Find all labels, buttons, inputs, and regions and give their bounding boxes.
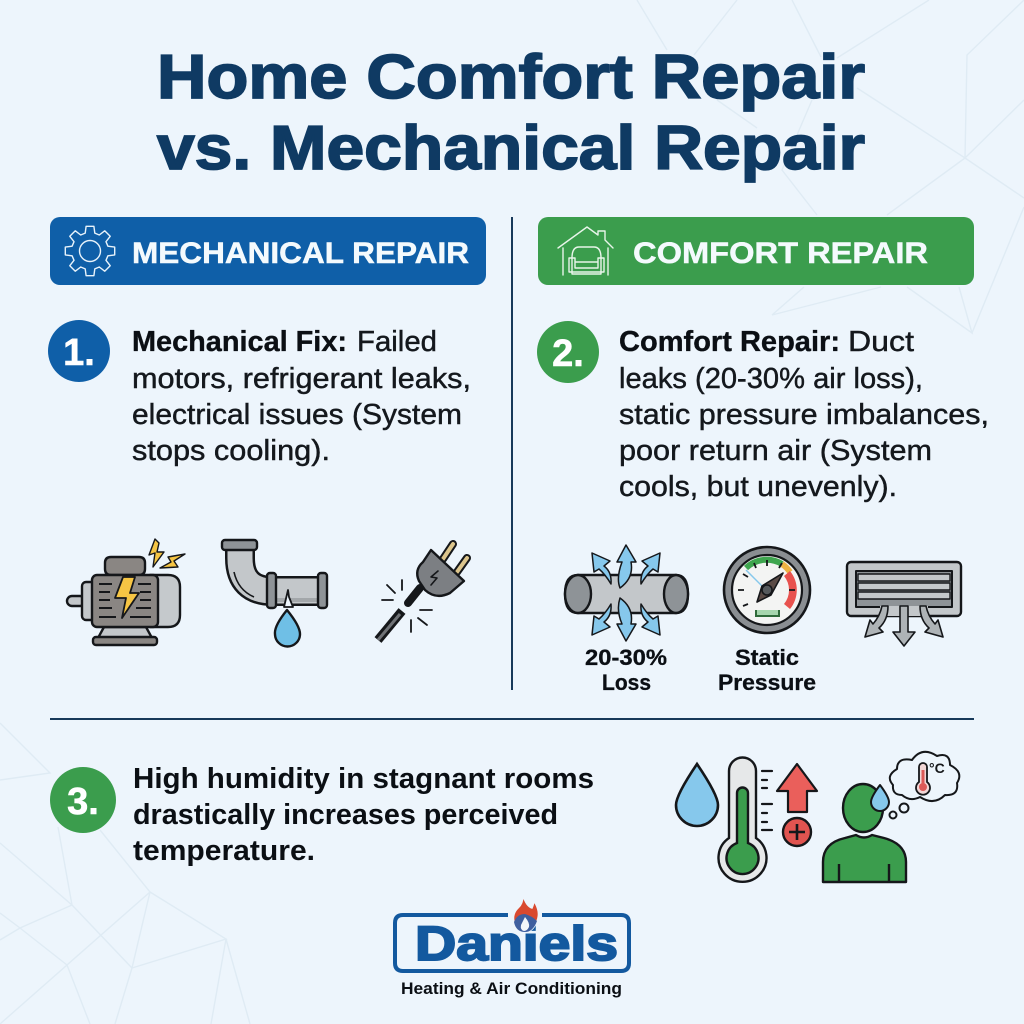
heading: mechanical repair: MECHANICAL REPAIR [132, 237, 469, 270]
text block: mechanical fix: Failed [357, 326, 437, 358]
text block: comfort repair: Comfort Repair: [619, 326, 840, 358]
title [157, 43, 865, 183]
title: vs. Mechanical Repair [157, 114, 865, 183]
tagline: Heating & Air Conditioning [401, 979, 622, 998]
text block: humidity [133, 763, 594, 867]
icon: leaking pipe [222, 540, 327, 646]
text block: mechanical fix: Mechanical Fix: [132, 326, 347, 358]
badge: number 2: 2. [552, 333, 584, 375]
icon: static pressure gauge [724, 547, 810, 633]
badge: number 3 [50, 767, 116, 833]
logo: Daniels [395, 895, 629, 998]
icon: house with sofa [558, 227, 613, 275]
text block: humidity: temperature. [133, 835, 315, 867]
text block: mechanical fix: stops cooling). [132, 435, 330, 467]
text block: humidity: drastically increases perceived [133, 799, 558, 831]
icon: thought bubble with thermometer [890, 752, 959, 818]
badge: number 1: 1. [63, 332, 95, 374]
icon: sweating person [823, 784, 906, 882]
horizontal divider [50, 718, 974, 720]
text block: mechanical fix: motors, refrigerant leaks, [132, 363, 471, 395]
text block: humidity: High humidity in stagnant rooms [133, 763, 594, 795]
panel: comfort repair header [538, 217, 974, 285]
icon: gear [65, 226, 115, 276]
icon: thought bubble with thermometer: °C [929, 760, 945, 776]
icon: temperature up arrow [777, 764, 817, 846]
text block: comfort repair: static pressure imbalances, [619, 399, 989, 431]
label: static pressure: Static [735, 645, 799, 670]
label: 20-30% loss [585, 645, 667, 695]
label: 20-30% loss: Loss [602, 670, 651, 695]
text block: comfort repair: Duct [848, 326, 914, 358]
text block: comfort repair: poor return air (System [619, 435, 932, 467]
icon: air vent [847, 562, 961, 646]
heading: comfort repair: COMFORT REPAIR [633, 237, 928, 270]
vertical divider [511, 217, 513, 690]
logo: Daniels: Daniels [415, 918, 618, 971]
label: 20-30% loss: 20-30% [585, 645, 667, 670]
label: static pressure [718, 645, 816, 695]
panel: mechanical repair header [50, 217, 486, 285]
text block: comfort repair: leaks (20-30% air loss), [619, 363, 923, 395]
icon: broken plug [378, 544, 467, 640]
icon: water drop [676, 764, 718, 826]
badge: number 3: 3. [67, 781, 99, 823]
icon: thermometer [718, 758, 772, 882]
text block: mechanical fix: electrical issues (System [132, 399, 462, 431]
badge: number 1 [48, 320, 110, 382]
icon: leaking duct [565, 545, 688, 641]
text block: comfort repair [619, 326, 989, 503]
text block: mechanical fix [132, 326, 471, 467]
title: Home Comfort Repair [157, 43, 865, 112]
text block: comfort repair: cools, but unevenly). [619, 471, 897, 503]
icon: flame [514, 895, 538, 932]
icon: failed motor [67, 539, 185, 645]
badge: number 2 [537, 321, 599, 383]
label: static pressure: Pressure [718, 670, 816, 695]
